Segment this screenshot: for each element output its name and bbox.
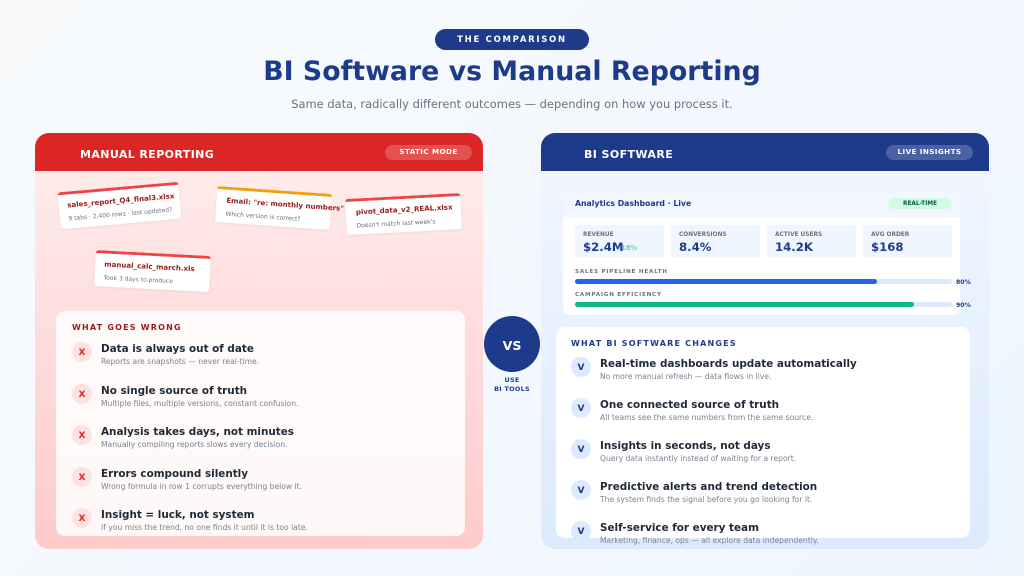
kpi: avg order: AVG ORDER [871, 232, 909, 238]
item: errors compound: Wrong formula in row 1 corrupts everything below it. [101, 482, 302, 491]
real-time badge [888, 198, 952, 209]
vs circle: VS [503, 338, 521, 352]
value: 80%: 80% [956, 279, 971, 286]
item: connected source [571, 398, 813, 422]
badge: the comparison: THE COMPARISON [457, 34, 567, 44]
item: out of date: Reports are snapshots — never real-time. [101, 357, 259, 366]
progress bar: campaign efficiency 90% [575, 302, 952, 307]
item: out of date: X [79, 348, 85, 358]
vs caption: USE [504, 376, 520, 384]
kpi: revenue [575, 225, 664, 257]
bar label: campaign efficiency: CAMPAIGN EFFICIENCY [575, 292, 662, 298]
dashboard card [563, 191, 960, 315]
dashboard title: Analytics Dashboard · Live [575, 199, 691, 208]
item: out of date [72, 342, 259, 366]
item: connected source: All teams see the same numbers from the same source. [600, 413, 813, 422]
bar label: sales pipeline: SALES PIPELINE HEALTH [575, 269, 668, 275]
revenue delta: +18% [616, 244, 637, 252]
kpi: active users: ACTIVE USERS [775, 232, 822, 238]
file card: sales report: sales_report_Q4_final3.xlsx [67, 191, 175, 210]
item: self-service: V [578, 527, 584, 537]
item: real-time dashboards: No more manual refresh — data flows in live. [600, 372, 771, 381]
subtitle: Same data, radically different outcomes — depending on how you process it. [291, 97, 733, 111]
heading: bi software: BI SOFTWARE [584, 148, 673, 161]
item: self-service [571, 521, 819, 545]
item: analysis time: Manually compiling reports slows every decision. [101, 440, 287, 449]
item: analysis time: X [79, 431, 85, 441]
panel header: bi software [541, 133, 989, 171]
panel: bi software [541, 133, 989, 549]
value: 90%: 90% [956, 302, 971, 309]
item: insight luck: X [79, 514, 85, 524]
kpi: revenue: REVENUE [583, 232, 614, 238]
item: real-time dashboards: Real-time dashboards update automatically [600, 358, 857, 370]
progress bar: sales pipeline 80% [575, 279, 952, 284]
item: errors compound [72, 467, 302, 491]
vs circle [484, 316, 540, 372]
kpi: avg order: $168 [871, 240, 904, 254]
item: insight luck: If you miss the trend, no one finds it until it is too late. [101, 523, 308, 532]
list: what bi software changes [556, 327, 970, 538]
vs caption [494, 376, 530, 393]
file card: pivot data: Doesn't match last week's [356, 218, 436, 229]
kpi: conversions [671, 225, 760, 257]
status badge: live insights: LIVE INSIGHTS [898, 147, 961, 156]
item: source of truth: Multiple files, multiple versions, constant confusion. [101, 399, 298, 408]
status badge: live insights [886, 145, 973, 160]
item: real-time dashboards: V [578, 363, 584, 373]
item: insights in seconds [571, 439, 796, 463]
item: predictive alerts: V [578, 486, 584, 496]
vs caption: BI TOOLS [494, 385, 530, 393]
item: analysis time: Analysis takes days, not minutes [101, 426, 294, 438]
item: out of date: Data is always out of date [101, 343, 254, 355]
title: BI Software vs Manual Reporting [263, 56, 761, 87]
kpi: avg order [863, 225, 952, 257]
file card: email [215, 186, 332, 230]
item: predictive alerts [571, 480, 817, 504]
item: real-time dashboards [571, 357, 857, 381]
file card: sales report: 9 tabs · 2,400 rows · last updated? [68, 206, 173, 222]
list: what goes wrong [56, 311, 465, 536]
item: analysis time [72, 425, 294, 449]
heading: manual reporting: MANUAL REPORTING [80, 148, 214, 161]
kpi: revenue: $2.4M [583, 240, 623, 254]
file card: email: Which version is correct? [225, 211, 301, 223]
kpi: conversions: CONVERSIONS [679, 232, 727, 238]
item: self-service: Self-service for every team [600, 522, 759, 534]
status badge: static mode: STATIC MODE [399, 147, 458, 156]
item: source of truth: X [79, 390, 85, 400]
item: predictive alerts: Predictive alerts and trend detection [600, 481, 817, 493]
item: self-service: Marketing, finance, ops — all explore data independently. [600, 536, 819, 545]
kpi: active users [767, 225, 856, 257]
item: predictive alerts: The system finds the signal before you go looking for it. [600, 495, 812, 504]
file card: sales report [58, 182, 181, 229]
status badge: static mode [385, 145, 472, 160]
item: insights in seconds: Insights in seconds, not days [600, 440, 771, 452]
item: insight luck [72, 508, 308, 532]
dashboard title bar [563, 191, 960, 217]
item: insights in seconds: Query data instantly instead of waiting for a report. [600, 454, 796, 463]
list heading: WHAT GOES WRONG [72, 323, 182, 332]
item: source of truth: No single source of truth [101, 385, 247, 397]
item: errors compound: Errors compound silently [101, 468, 248, 480]
file card: pivot data: pivot_data_v2_REAL.xlsx [356, 202, 453, 216]
file card: manual calc [94, 250, 211, 292]
panel header: manual reporting [35, 133, 483, 171]
kpi: conversions: 8.4% [679, 240, 711, 254]
item: connected source: One connected source of truth [600, 399, 779, 411]
item: insights in seconds: V [578, 445, 584, 455]
kpi: active users: 14.2K [775, 240, 813, 254]
file card: pivot data [345, 193, 462, 235]
badge: the comparison [435, 29, 589, 50]
file card: manual calc: Took 3 days to produce [103, 274, 173, 285]
panel: manual reporting [35, 133, 483, 549]
item: connected source: V [578, 404, 584, 414]
file card: manual calc: manual_calc_march.xls [104, 259, 195, 273]
list heading: WHAT BI SOFTWARE CHANGES [571, 338, 737, 348]
file card: email: Email: "re: monthly numbers" [226, 196, 344, 213]
item: insight luck: Insight = luck, not system [101, 509, 254, 521]
item: source of truth [72, 384, 298, 408]
real-time badge: REAL-TIME [903, 200, 937, 206]
item: errors compound: X [79, 473, 85, 483]
